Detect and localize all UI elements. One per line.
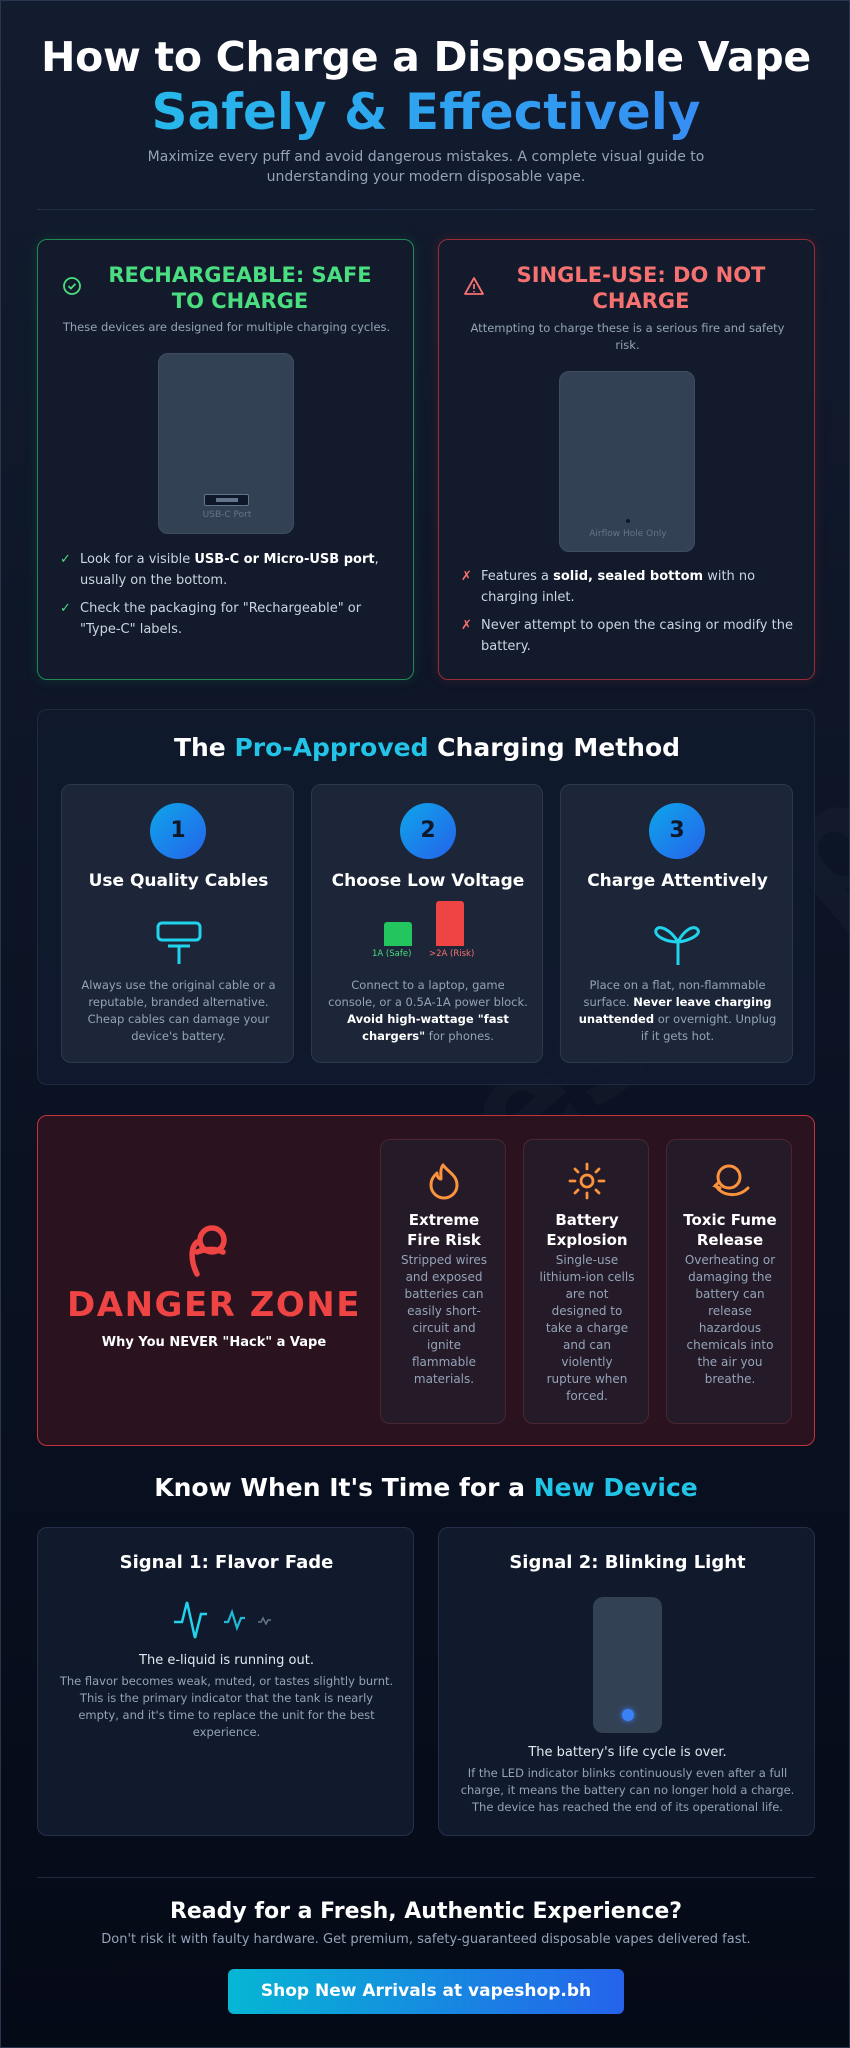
step 3: Place on a flat, non-flammable surface. Never leave charging unattended or overnight. Unplug if it gets hot. <box>579 978 776 1043</box>
subtext: Attempting to charge these is a serious fire and safety risk. <box>471 321 784 352</box>
device: sealed <box>559 371 695 552</box>
bullets: Never attempt to open the casing or modify the battery. <box>481 618 793 654</box>
bullets: ✓ <box>60 601 71 616</box>
step 1: Use Quality Cables <box>89 871 268 891</box>
heading: The Pro-Approved Charging Method <box>174 733 680 762</box>
bullets: ✗ <box>461 569 472 584</box>
danger title: DANGER ZONE <box>67 1285 361 1325</box>
device: usb-c <box>158 353 294 534</box>
step 1 <box>61 784 294 1063</box>
icon: cable <box>156 922 202 964</box>
panel: signal 1: Signal 1: Flavor Fade <box>120 1552 333 1573</box>
cta heading: Ready for a Fresh, Authentic Experience? <box>170 1899 682 1924</box>
panel: signal 2: The battery's life cycle is over. <box>528 1745 727 1760</box>
step 3 <box>560 784 793 1063</box>
step 1: 1 <box>170 818 186 843</box>
icon: fading waves <box>174 1602 271 1638</box>
subtitle: Maximize every puff and avoid dangerous mistakes. A complete visual guide to understanding your modern disposable vape. <box>148 149 704 185</box>
step 1: Always use the original cable or a reputable, branded alternative. Cheap cables can damage your device's battery. <box>81 978 276 1043</box>
title <box>41 33 811 141</box>
icon: check circle <box>63 277 81 295</box>
device: sealed: Airflow Hole Only <box>589 529 667 539</box>
risk: fire: Stripped wires and exposed batteries can easily short-circuit and ignite flammable materials. <box>401 1253 487 1386</box>
cta text: Don't risk it with faulty hardware. Get premium, safety-guaranteed disposable vapes delivered fast. <box>101 1932 751 1947</box>
step 2: Choose Low Voltage <box>332 871 524 891</box>
heading: RECHARGEABLE: SAFE TO CHARGE <box>108 263 372 313</box>
panel: single-use <box>438 239 815 680</box>
panel: danger zone <box>37 1115 815 1446</box>
step 2: 1A (Safe) <box>372 949 411 959</box>
bullets: ✓ <box>60 552 71 567</box>
risk: fumes <box>666 1139 792 1424</box>
panel: signal 1 <box>37 1527 414 1836</box>
bullets: Features a solid, sealed bottom with no charging inlet. <box>481 569 755 604</box>
panel: signal 2: Signal 2: Blinking Light <box>509 1552 746 1573</box>
step 3: 3 <box>669 818 685 843</box>
panel: charging method <box>37 709 815 1085</box>
risk: explosion: Battery Explosion <box>546 1211 628 1249</box>
title: How to Charge a Disposable Vape <box>41 33 811 81</box>
danger subtitle: Why You NEVER "Hack" a Vape <box>102 1335 326 1350</box>
panel: signal 2 <box>438 1527 815 1836</box>
panel: signal 1: The flavor becomes weak, muted, or tastes slightly burnt. This is the primary indicator that the tank is nearly empty, and it's time to replace the unit for the best experience. <box>60 1674 393 1739</box>
device: usb-c: USB-C Port <box>203 510 251 520</box>
icon: warning <box>464 277 484 295</box>
bullets <box>60 552 379 636</box>
title: Safely & Effectively <box>151 83 701 141</box>
icon: danger <box>189 1225 227 1277</box>
panel: signal 2: If the LED indicator blinks continuously even after a full charge, it means the battery can no longer hold a charge. The device has reached the end of its operational life. <box>461 1766 794 1814</box>
heading: new device: Know When It's Time for a New Device <box>154 1473 698 1502</box>
cta button: Shop New Arrivals at vapeshop.bh <box>261 1981 591 2001</box>
bullets <box>461 569 793 654</box>
cta button <box>228 1969 624 2014</box>
step 3: Charge Attentively <box>587 871 768 891</box>
device: blinking led <box>593 1597 662 1733</box>
heading: SINGLE-USE: DO NOT CHARGE <box>517 263 765 313</box>
risk: explosion <box>523 1139 649 1424</box>
chart: amperage bars <box>372 901 474 959</box>
icon: sprout <box>654 926 700 965</box>
step 2: 2 <box>420 818 436 843</box>
risk: fire: Extreme Fire Risk <box>407 1211 481 1249</box>
bullets: ✗ <box>461 618 472 633</box>
step 2: Connect to a laptop, game console, or a 0.5A-1A power block. Avoid high-wattage "fast chargers" for phones. <box>328 978 528 1043</box>
subtext: These devices are designed for multiple charging cycles. <box>63 320 390 334</box>
bullets: Check the packaging for "Rechargeable" or "Type-C" labels. <box>80 601 361 636</box>
risk: fumes: Overheating or damaging the battery can release hazardous chemicals into the air you breathe. <box>685 1253 775 1386</box>
bullets: Look for a visible USB-C or Micro-USB port, usually on the bottom. <box>80 552 379 588</box>
risk: fire <box>380 1139 506 1424</box>
risk: explosion: Single-use lithium-ion cells are not designed to take a charge and can violently rupture when forced. <box>540 1253 634 1403</box>
step 2: >2A (Risk) <box>429 949 474 959</box>
panel: rechargeable <box>37 239 414 680</box>
step 2 <box>311 784 543 1063</box>
panel: signal 1: The e-liquid is running out. <box>139 1653 314 1668</box>
risk: fumes: Toxic Fume Release <box>683 1211 777 1249</box>
